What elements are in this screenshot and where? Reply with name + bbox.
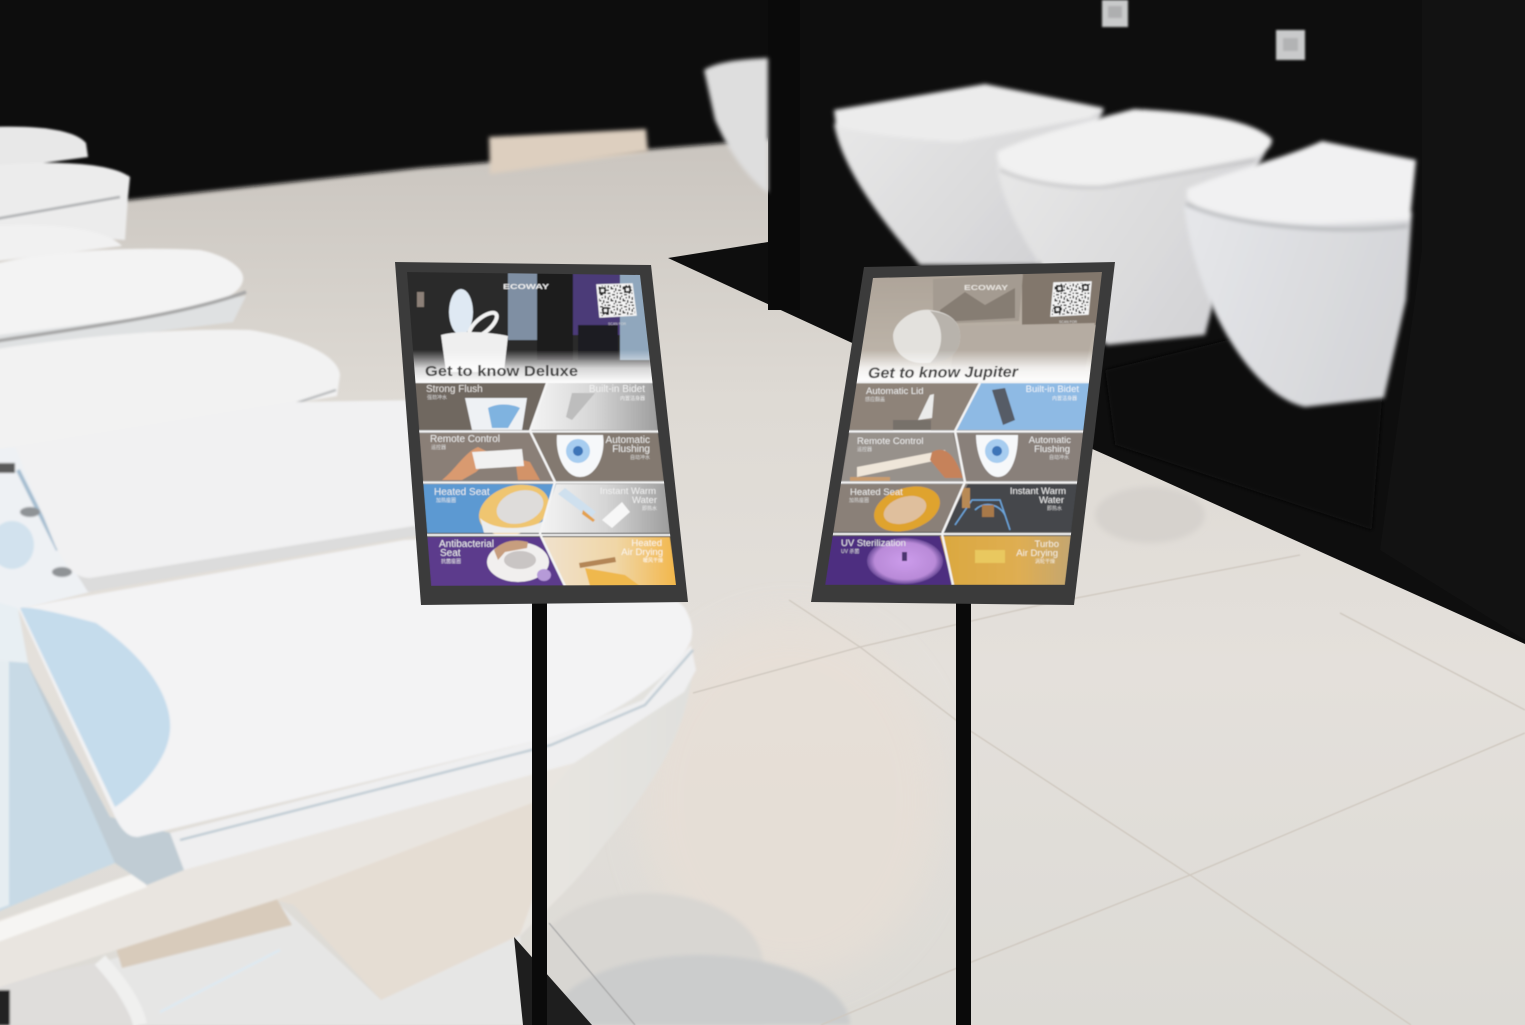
white dividers	[410, 383, 672, 586]
cell: UV Sterilization: UV 杀菌	[841, 548, 859, 555]
cell: Heated Air Drying	[542, 537, 677, 586]
wall-hung toilet 2	[997, 109, 1272, 345]
cell: Remote Control	[419, 433, 555, 481]
lid 2	[0, 163, 130, 240]
sign: Get to know Deluxe	[395, 262, 688, 605]
hinge detail	[0, 463, 72, 577]
cell: Remote Control: 遥控器	[857, 446, 872, 453]
cell: Instant Warm Water: Instant Warm	[1010, 486, 1066, 497]
white title band	[857, 352, 1092, 382]
cell: Heated Seat	[833, 484, 968, 533]
cell: Automatic Flushing: Flushing	[612, 444, 650, 455]
beige underside	[275, 790, 540, 1000]
hero photo	[407, 272, 650, 372]
poster title: Get to know Jupiter	[868, 364, 1019, 382]
cell: Remote Control: Remote Control	[857, 436, 924, 447]
lid	[18, 539, 692, 837]
cell: Instant Warm Water: Water	[1039, 495, 1064, 506]
lower left base	[0, 962, 135, 1025]
wall-hung toilet 3	[1184, 141, 1416, 407]
cell: Heated Seat: Heated Seat	[434, 487, 490, 498]
cell: Heated Air Drying: 暖风干燥	[643, 557, 663, 564]
cell: Antibacterial Seat: 抗菌座圈	[441, 558, 461, 565]
lid 3	[0, 225, 122, 262]
cell: Heated Air Drying: Heated	[631, 538, 662, 549]
cell: Heated Seat: 加热座圈	[849, 497, 869, 504]
cell: Strong Flush: Strong Flush	[426, 384, 483, 395]
sign stand poles	[514, 600, 971, 1025]
cell: Automatic Flushing: Flushing	[1034, 444, 1070, 455]
cell: Remote Control	[841, 433, 965, 481]
hero photo	[858, 272, 1102, 378]
sign frame	[395, 262, 688, 605]
QR code	[1051, 282, 1091, 316]
cell: Instant Warm Water: 即热水	[642, 505, 657, 512]
cell: Automatic Flushing: 自动冲水	[630, 454, 650, 461]
lid 4	[0, 296, 246, 352]
poster title: Get to know Deluxe	[425, 363, 578, 380]
ceramic body	[480, 660, 693, 937]
cell: Automatic Flushing: 自动冲水	[1049, 454, 1069, 461]
QR caption: SCAN FOR	[1059, 320, 1078, 324]
cell: Turbo Air Drying: 涡轮干燥	[1035, 558, 1055, 565]
cell: Built-in Bidet: 内置洁身器	[1052, 395, 1077, 402]
lid 6	[57, 515, 420, 592]
white dividers	[830, 382, 1095, 585]
floor tile seams and reflections	[533, 310, 1525, 1025]
cell: UV Sterilization: UV Sterilization	[841, 538, 906, 549]
cell: Automatic Flushing	[532, 433, 664, 481]
cell: Automatic Lid: 感应翻盖	[865, 396, 885, 403]
cell: Instant Warm Water: 即热水	[1047, 505, 1062, 512]
right black display block	[668, 0, 1525, 644]
ceramic front band	[0, 763, 574, 990]
gap below lids, pale	[0, 447, 90, 625]
cell: Antibacterial Seat: Antibacterial	[439, 539, 494, 550]
back wall, black	[0, 0, 800, 205]
brand logo: ECOWAY	[964, 283, 1008, 292]
cell: Instant Warm Water	[942, 484, 1077, 532]
cell: Heated Seat: 加热座圈	[436, 497, 456, 504]
cell: Turbo Air Drying: Air Drying	[1016, 548, 1058, 559]
cell: Built-in Bidet: 内置洁身器	[620, 395, 645, 402]
cell: Remote Control: Remote Control	[430, 434, 500, 445]
stacked toilet lids, left	[0, 127, 420, 625]
peach skirting strip	[489, 129, 648, 174]
cell: Turbo Air Drying	[940, 536, 1071, 585]
cell: Instant Warm Water: Water	[632, 495, 657, 506]
sign frame	[811, 262, 1115, 605]
poster artwork	[400, 270, 677, 586]
lid 5	[0, 330, 340, 455]
cell: Remote Control: 遥控器	[431, 444, 446, 451]
cell: Automatic Flushing: Automatic	[1029, 435, 1071, 446]
cell: Heated Air Drying: Air Drying	[621, 547, 663, 558]
pale blue reflection on lid	[20, 608, 170, 807]
foreground toilet	[0, 539, 696, 1025]
cell: Built-in Bidet: Built-in Bidet	[1026, 384, 1079, 395]
reflected toilet behind pillar	[704, 58, 768, 193]
cell: Automatic Lid	[849, 383, 980, 431]
cell: Built-in Bidet	[955, 383, 1090, 430]
cell: Automatic Flushing: Automatic	[606, 435, 650, 446]
cell: Instant Warm Water	[540, 484, 670, 533]
lower bowl	[100, 905, 525, 1025]
cell: Built-in Bidet: Built-in Bidet	[589, 384, 645, 395]
wall-hung toilet 1	[834, 84, 1104, 265]
cell: Heated Seat: Heated Seat	[850, 487, 903, 498]
cell: Antibacterial Seat	[427, 537, 565, 586]
sign: Get to know Jupiter	[811, 262, 1115, 605]
cell: Strong Flush: 强劲冲水	[427, 394, 447, 401]
cell: Strong Flush	[415, 383, 547, 430]
small wall switches	[1102, 0, 1305, 60]
white title band	[400, 350, 660, 383]
QR caption: SCAN FOR	[608, 322, 627, 326]
cell: UV Sterilization	[825, 536, 953, 585]
poster artwork	[825, 270, 1110, 585]
cell: Automatic Flushing	[953, 433, 1084, 481]
tray, pale blue	[0, 660, 115, 915]
cell: Built-in Bidet	[530, 383, 658, 430]
cell: Automatic Lid: Automatic Lid	[866, 386, 924, 397]
cell: Antibacterial Seat: Seat	[440, 548, 461, 559]
cell: Instant Warm Water: Instant Warm	[600, 486, 656, 497]
cell: Heated Seat	[423, 483, 556, 534]
lid 1	[0, 127, 88, 170]
lid rim strip	[170, 645, 696, 870]
cell: Turbo Air Drying: Turbo	[1035, 539, 1059, 550]
QR code	[597, 284, 636, 317]
brand logo: ECOWAY	[503, 282, 549, 291]
shadow strip beside lid	[27, 663, 184, 885]
